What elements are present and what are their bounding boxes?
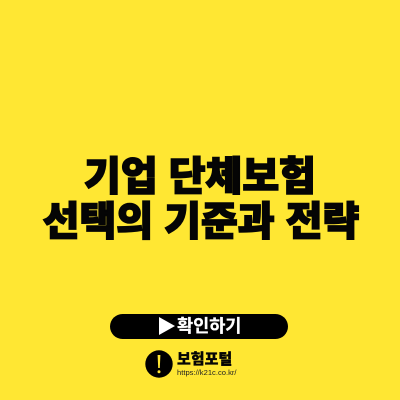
icon: exclamation circle	[145, 350, 173, 378]
logo url: https://k21c.co.kr/	[177, 368, 237, 377]
logo: 보험포털	[145, 350, 237, 378]
title	[42, 155, 360, 244]
icon: play triangle	[159, 317, 175, 335]
logo name: 보험포털	[177, 351, 232, 368]
title: 선택의 기준과 전략	[43, 200, 359, 244]
button: 확인하기	[110, 314, 288, 339]
title: 기업 단체보험	[84, 155, 316, 199]
button label: 확인하기	[177, 316, 241, 336]
